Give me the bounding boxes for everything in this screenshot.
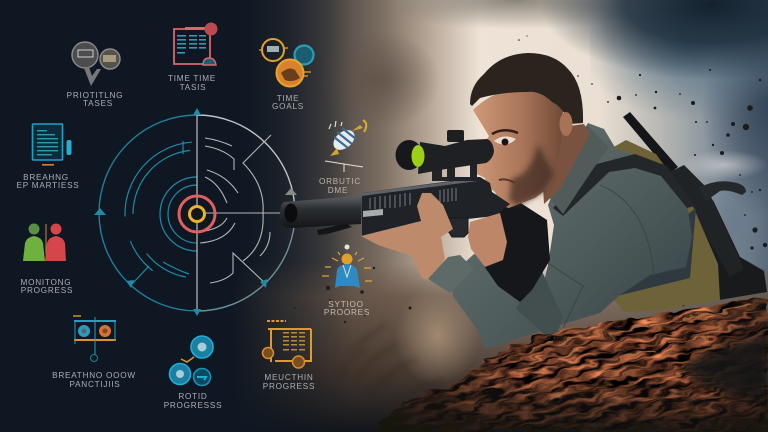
collar [550, 125, 609, 214]
label: SYTIOO [328, 300, 364, 309]
grass mass [370, 296, 768, 432]
torso shadow [484, 198, 550, 302]
label: PROORES [324, 308, 370, 317]
foreground grass [340, 296, 768, 432]
icon group: time goals [259, 39, 314, 111]
label: PANCTIJIIS [69, 380, 121, 389]
pocket seam [540, 185, 654, 328]
dark shirt under jacket [600, 208, 696, 300]
debris flying in the sky [294, 35, 767, 323]
label: PROGRESS [263, 382, 315, 391]
icon group: synced person [322, 244, 372, 317]
center crosshair line [196, 113, 198, 311]
inner light arcs, right half [197, 135, 283, 284]
icon group: monitoring people [21, 224, 73, 295]
label: MEUCTHIN [264, 373, 314, 382]
front hand [361, 193, 453, 281]
label: PRIOTITLNG [67, 91, 123, 100]
icon group: candy-shaped objective [319, 120, 366, 195]
face [473, 89, 563, 208]
rail highlights [362, 178, 478, 196]
label: ROTID [178, 392, 208, 401]
icon group: prioritizing tasks [67, 42, 123, 108]
label: TIME TIME [168, 74, 216, 83]
label: MONITONG [21, 278, 71, 287]
scope objective [396, 140, 422, 170]
arrow markers [94, 108, 297, 316]
jacket body [450, 123, 692, 349]
label: EP MARTIESS [16, 181, 80, 190]
label: BREATHNO OOOW [52, 371, 136, 380]
scope mount [432, 164, 480, 181]
rear hand on grip [468, 213, 507, 267]
label: TIME [277, 94, 299, 103]
muzzle [284, 204, 298, 222]
rifle stock and body [362, 177, 510, 236]
label: PROGRESSS [164, 401, 222, 410]
barrel [280, 196, 362, 228]
sniper figure [280, 53, 767, 349]
tactical vest [606, 140, 720, 312]
ear [560, 112, 572, 136]
label: TASES [83, 99, 113, 108]
target reticle diagram [94, 108, 298, 316]
beard [509, 144, 554, 206]
label: TASIS [180, 83, 206, 92]
outer ring [99, 115, 295, 311]
rifle marking [363, 209, 383, 217]
bullseye [179, 196, 215, 232]
gear rifle on back and pack [623, 112, 767, 300]
icon group: breathing [16, 124, 80, 190]
inner teal arcs, left half [96, 113, 298, 315]
scope tube [418, 139, 494, 174]
label: DME [328, 186, 348, 195]
faint dark streaks on the left ground [340, 325, 440, 410]
icon group: schedule board [262, 321, 315, 391]
label: PROGRESS [21, 286, 73, 295]
lens [412, 145, 424, 167]
icon group: rotary progress [164, 336, 222, 410]
dark shadow in grass [680, 336, 768, 398]
sleeve fold detail [516, 267, 563, 343]
foregrip rail [317, 224, 352, 235]
mouth [499, 179, 515, 183]
rifle rail texture [370, 188, 456, 209]
dark strap [553, 154, 695, 216]
label: BREAHNG [23, 173, 69, 182]
neck [540, 124, 590, 204]
icon group: breathing flow [52, 316, 136, 389]
label: GOALS [272, 102, 304, 111]
scope turret [447, 130, 464, 142]
hair [470, 53, 583, 124]
trigger guard [448, 218, 468, 237]
eye [492, 130, 518, 146]
forearm sleeve cuff [428, 255, 474, 293]
icon group: time tasks [168, 22, 218, 92]
label: ORBUTIC [319, 177, 361, 186]
